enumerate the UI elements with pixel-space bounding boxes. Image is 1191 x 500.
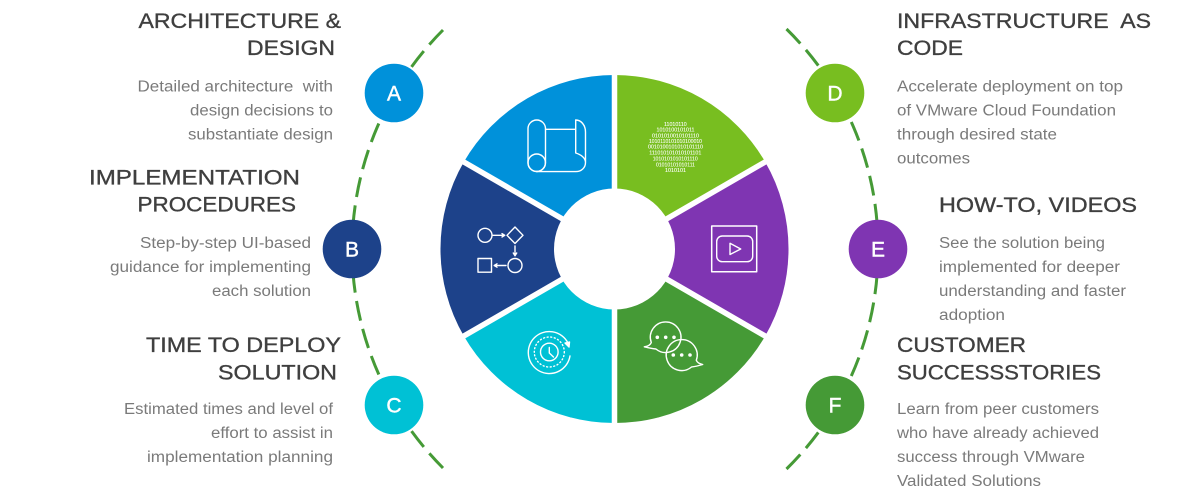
badge F: F [829, 394, 841, 418]
icon: binary globe: 1010101010101110 [653, 156, 698, 162]
text: videos description [939, 235, 1126, 324]
heading: architecture and design [138, 10, 341, 60]
heading: time to deploy solution: SOLUTION [218, 362, 337, 384]
text: time description: effort to assist in [211, 425, 333, 442]
text: implementation description: Step-by-step UI-based [140, 235, 311, 252]
segment: videos purple [614, 162, 789, 336]
text: infrastructure description: of VMware Cloud Foundation [897, 102, 1116, 120]
badge E: E [871, 238, 885, 262]
badge D [806, 64, 864, 122]
icon: binary globe: 0010100101010101110 [648, 145, 703, 151]
text: architecture description: Detailed architecture with [138, 78, 333, 96]
segment: stories green [614, 249, 765, 423]
segment: procedures navy [440, 162, 614, 336]
icon: binary globe: 1010100101011 [656, 128, 694, 134]
segment: architecture blue [464, 75, 614, 249]
icon: binary globe: 11010110 [664, 122, 687, 128]
item E [849, 194, 1137, 324]
text: implementation description: each solution [212, 283, 311, 300]
segment: time cyan [464, 249, 614, 423]
text: stories description [896, 401, 1099, 490]
item F [806, 334, 1101, 490]
heading: implementation procedures: PROCEDURES [138, 194, 296, 216]
item B [89, 166, 381, 300]
badge F [806, 376, 864, 434]
heading: implementation procedures: IMPLEMENTATION [89, 166, 300, 190]
item C [124, 334, 423, 466]
dashed arc: right [786, 29, 878, 469]
text: stories description: Validated Solutions [897, 473, 1041, 490]
text: implementation description: guidance for implementing [110, 259, 311, 276]
icon: video player [712, 226, 757, 272]
heading: infrastructure as code: INFRASTRUCTURE AS [897, 10, 1151, 33]
text: videos description: See the solution being [939, 235, 1105, 252]
text: infrastructure description [897, 78, 1123, 168]
text: videos description: adoption [939, 307, 1005, 324]
text: architecture description [138, 78, 333, 144]
text: videos description: understanding and faster [939, 283, 1126, 300]
heading: infrastructure as code: CODE [897, 37, 963, 60]
dashed arc: left [352, 30, 443, 468]
text: stories description: success through VMware [897, 449, 1085, 466]
badge B: B [345, 238, 359, 262]
segment: infrastructure green [614, 75, 765, 249]
badge E [849, 220, 907, 278]
heading: architecture and design: DESIGN [247, 37, 335, 60]
text: infrastructure description: through desired state [897, 126, 1057, 144]
icon: binary globe: 1010110101010100010 [649, 139, 702, 145]
heading: implementation procedures [89, 166, 300, 216]
badge A [365, 64, 423, 122]
icon: binary globe: 111010101010101101 [649, 151, 701, 157]
text: videos description: implemented for deeper [939, 259, 1120, 276]
icon: binary globe: 01010101010111 [656, 162, 695, 168]
heading: architecture and design: ARCHITECTURE & [138, 10, 341, 33]
text: stories description: Learn from peer customers [897, 401, 1099, 418]
text: time description: Estimated times and level of [124, 401, 334, 418]
heading: time to deploy solution [146, 334, 341, 384]
icon: flow chart [478, 227, 523, 272]
heading: how-to videos: HOW-TO, VIDEOS [939, 194, 1137, 217]
icon: chat bubbles [644, 322, 703, 371]
icon: binary globe: 0101010010101110 [652, 133, 699, 139]
badge C: C [386, 394, 402, 418]
badge A: A [387, 82, 401, 106]
icon: binary globe [648, 122, 703, 174]
heading: customer success stories [897, 334, 1101, 384]
text: infrastructure description: outcomes [897, 150, 970, 168]
heading: time to deploy solution: TIME TO DEPLOY [146, 334, 341, 357]
text: stories description: who have already achieved [896, 425, 1099, 442]
item D [806, 10, 1151, 168]
heading: customer success stories: CUSTOMER [897, 334, 1026, 357]
badge B [323, 220, 381, 278]
icon: binary globe: 1010101 [665, 168, 686, 174]
text: time description [124, 401, 334, 466]
heading: customer success stories: SUCCESSSTORIES [897, 362, 1101, 384]
text: implementation description [110, 235, 311, 300]
text: architecture description: design decisions to [190, 102, 333, 120]
badge C [365, 376, 423, 434]
text: architecture description: substantiate design [188, 126, 333, 144]
badge D: D [827, 82, 843, 106]
text: infrastructure description: Accelerate deployment on top [897, 78, 1123, 96]
icon: blueprint scroll [528, 120, 586, 172]
text: time description: implementation planning [147, 449, 333, 466]
donut wheel [440, 65, 789, 433]
icon: clock with cycle arrow [528, 332, 570, 374]
item A [138, 10, 423, 144]
heading: infrastructure as code [897, 10, 1151, 60]
